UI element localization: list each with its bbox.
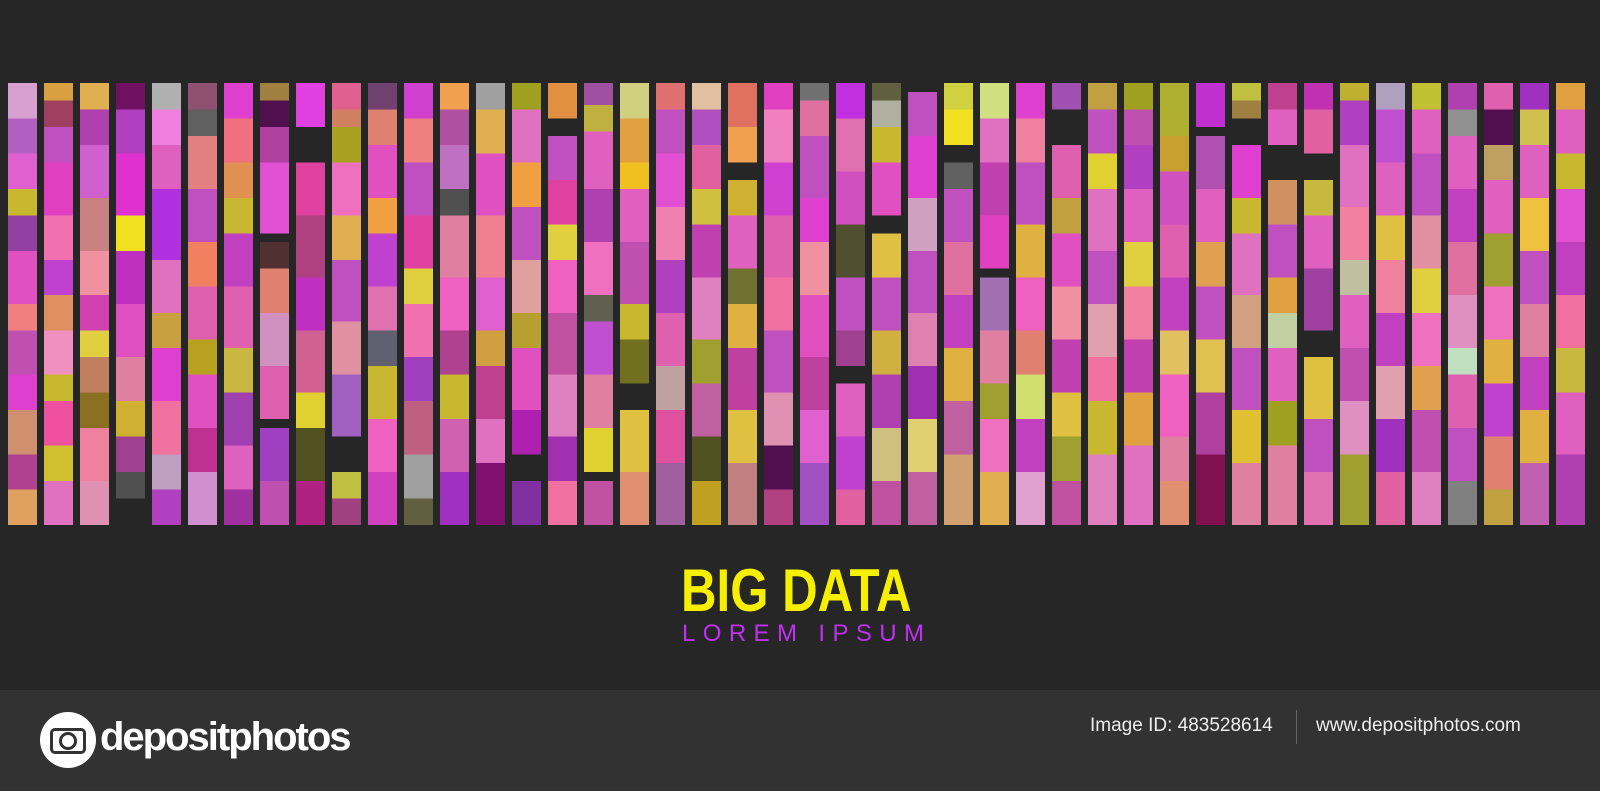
website: www.depositphotos.com (1316, 715, 1521, 736)
footer bar (0, 690, 1600, 791)
logo text: depositphotos (100, 715, 350, 759)
icon: camera logo (40, 712, 96, 768)
title: BIG DATA: BIG DATA (681, 557, 911, 624)
subtitle: LOREM IPSUM: LOREM IPSUM (682, 620, 931, 647)
divider (1296, 710, 1297, 744)
image id: Image ID: 483528614 (1090, 715, 1273, 736)
